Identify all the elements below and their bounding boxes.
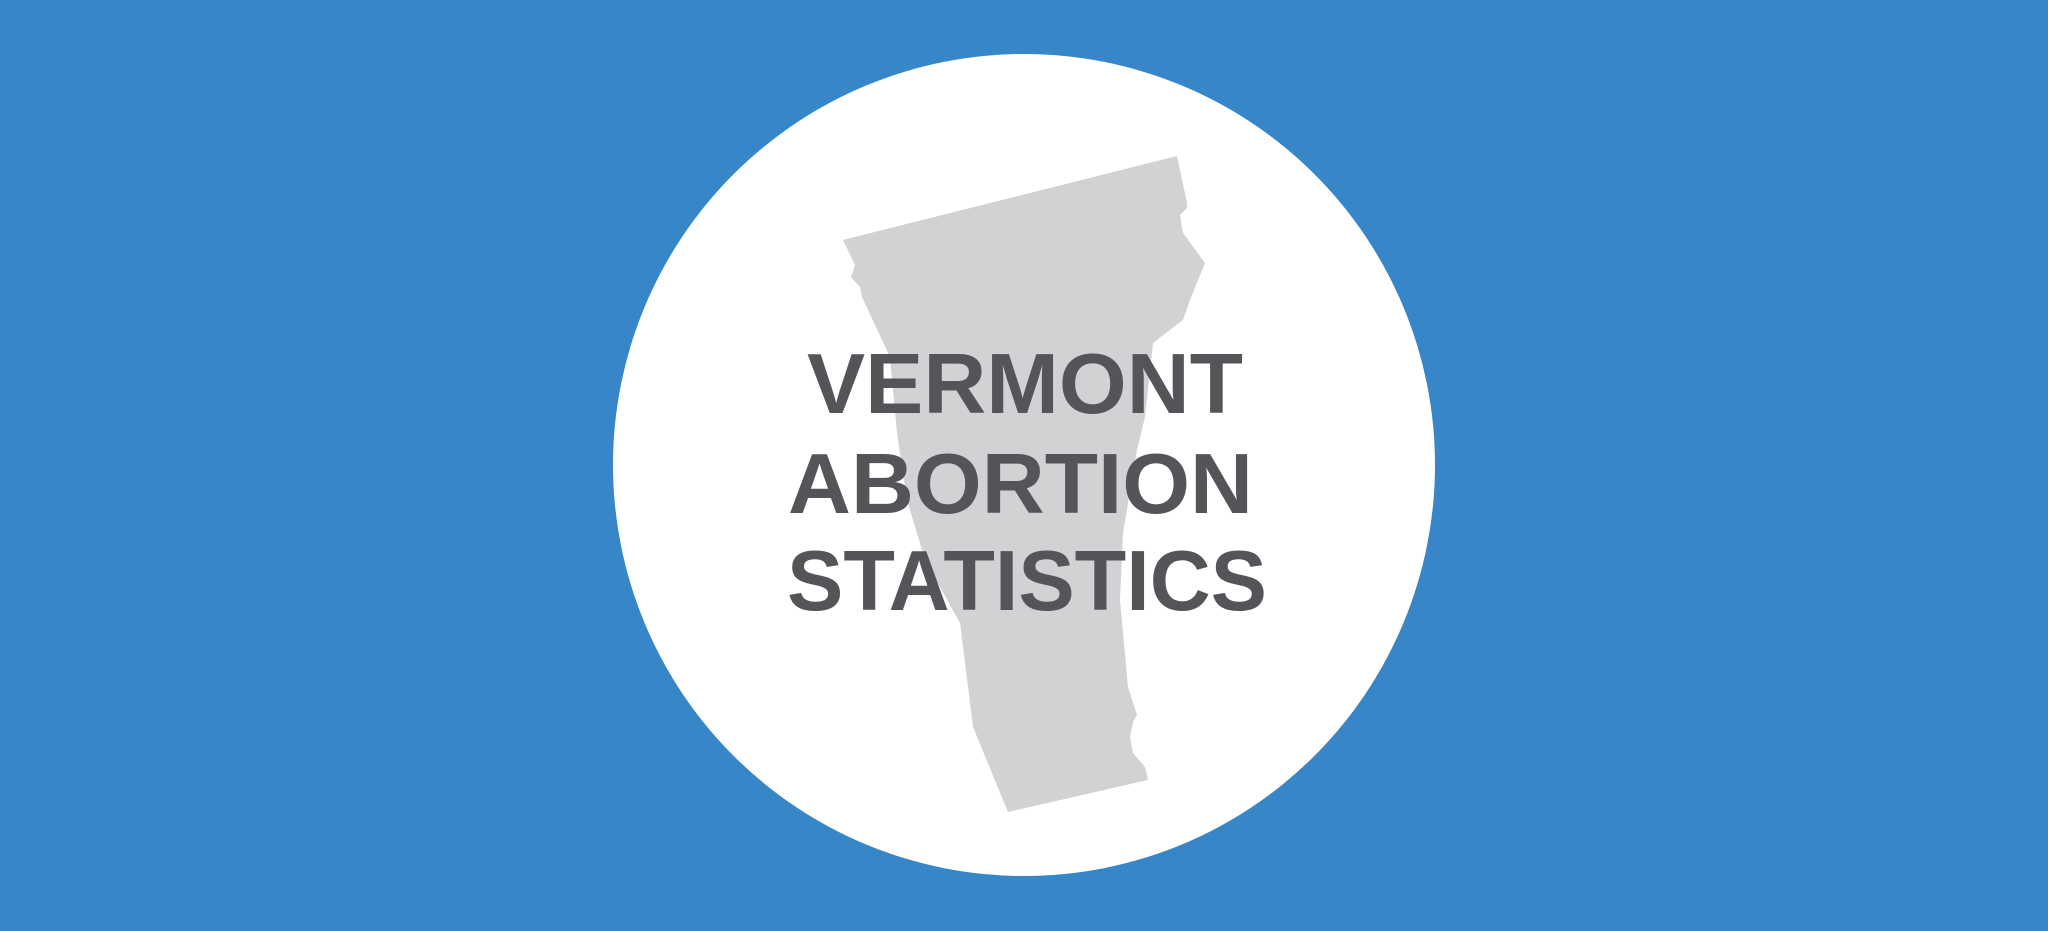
title: STATISTICS	[787, 534, 1267, 629]
title: ABORTION	[788, 437, 1253, 532]
title: VERMONT	[807, 337, 1243, 432]
title	[787, 337, 1267, 629]
white circle	[613, 54, 1435, 876]
map: Vermont silhouette	[843, 156, 1205, 812]
